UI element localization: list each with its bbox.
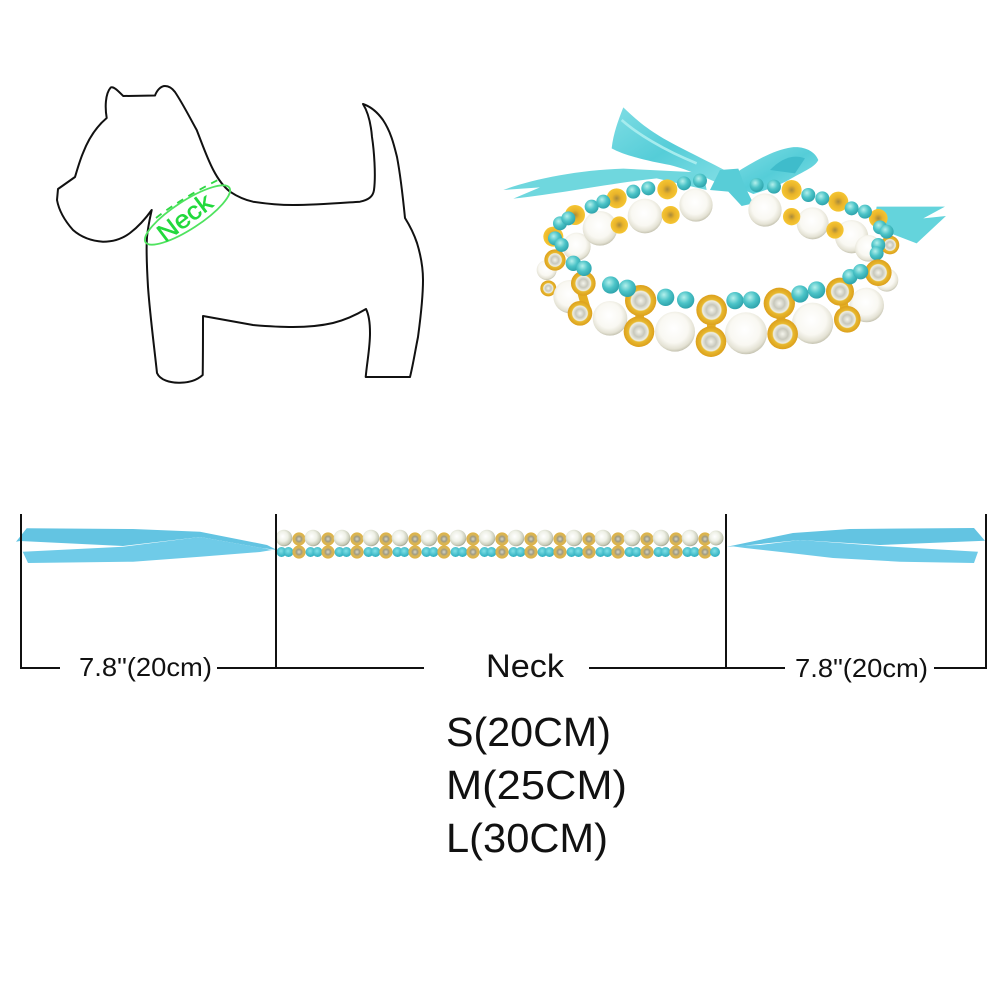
right length label: 7.8"(20cm) (795, 653, 928, 683)
neck length label: Neck (486, 648, 565, 684)
size medium: M(25CM) (446, 762, 627, 808)
dimension lines (21, 514, 986, 668)
back strand (537, 174, 899, 296)
front strand (553, 238, 892, 357)
neck dashed line (156, 180, 218, 218)
size large: L(30CM) (446, 815, 608, 861)
size list (446, 709, 627, 861)
beaded strand (276, 530, 724, 559)
product photo: pearl collar (503, 107, 946, 357)
neck label: Neck (152, 188, 219, 248)
neck ellipse (138, 176, 237, 254)
dog silhouette (57, 86, 423, 383)
ribbon bow and tails (503, 107, 946, 243)
dog outline with neck marker (57, 86, 423, 383)
left length label: 7.8"(20cm) (79, 652, 212, 682)
size small: S(20CM) (446, 709, 611, 755)
right ribbon tails (727, 528, 985, 563)
left ribbon tails (16, 528, 277, 563)
flat collar measurement diagram (16, 514, 986, 684)
